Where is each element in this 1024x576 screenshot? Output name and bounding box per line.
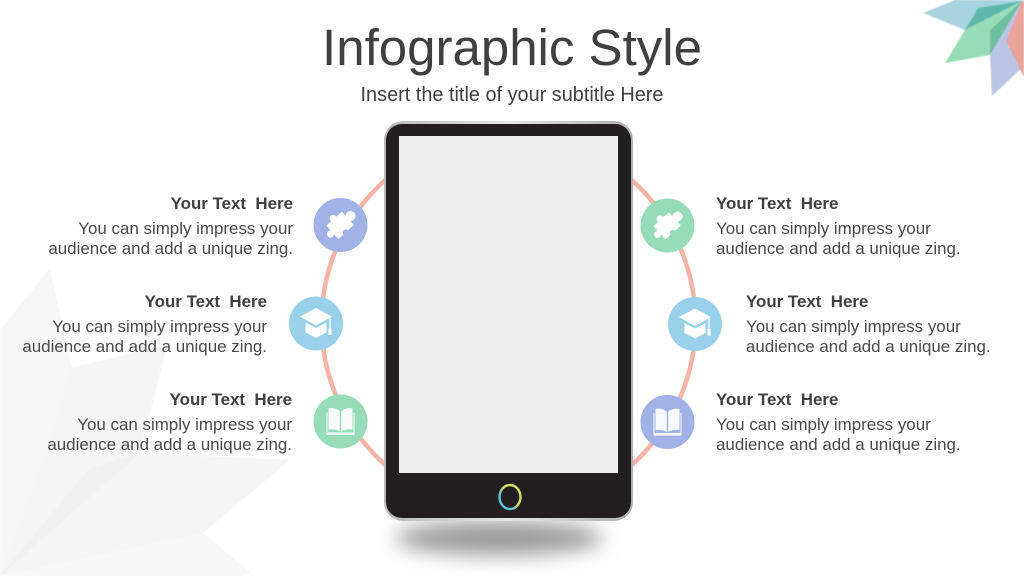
icon: book right [640,395,694,449]
item left 3: You can simply impress your [77,415,292,434]
item left 1: Your Text Here [171,194,293,213]
item left 3: Your Text Here [170,390,292,409]
connector arc: left [322,176,390,469]
item right 1: You can simply impress your [716,219,931,238]
home button [500,485,520,509]
title: Infographic Style [322,19,702,76]
item right 3: You can simply impress your [716,415,931,434]
connector arc: right [627,176,695,469]
tablet device [384,121,633,521]
item right 3: audience and add a unique zing. [716,435,961,454]
item left 1: audience and add a unique zing. [48,239,293,258]
item right 2: audience and add a unique zing. [746,337,991,356]
item right 1: Your Text Here [716,194,838,213]
item left 3 [47,390,292,454]
icon: puzzle right [640,198,694,252]
item right 3 [716,390,961,454]
subtitle: Insert the title of your subtitle Here [361,84,663,106]
decoration: grey polygons bottom left [0,268,290,576]
item left 2: You can simply impress your [52,317,267,336]
item left 2 [22,292,267,356]
decoration: coloured polygons top right [923,0,1024,96]
phone shadow [395,521,603,555]
icon: graduation cap right [668,297,722,351]
item left 1 [48,194,293,258]
item right 3: Your Text Here [716,390,838,409]
icon: graduation cap left [289,296,343,350]
item left 2: Your Text Here [145,292,267,311]
item right 2 [746,292,991,356]
item left 3: audience and add a unique zing. [47,435,292,454]
tablet screen [399,136,618,473]
item right 2: You can simply impress your [746,317,961,336]
icon: book left [314,394,368,448]
item left 1: You can simply impress your [78,219,293,238]
item right 1: audience and add a unique zing. [716,239,961,258]
item left 2: audience and add a unique zing. [22,337,267,356]
item right 2: Your Text Here [746,292,868,311]
icon: puzzle left [314,198,368,252]
item right 1 [716,194,961,258]
